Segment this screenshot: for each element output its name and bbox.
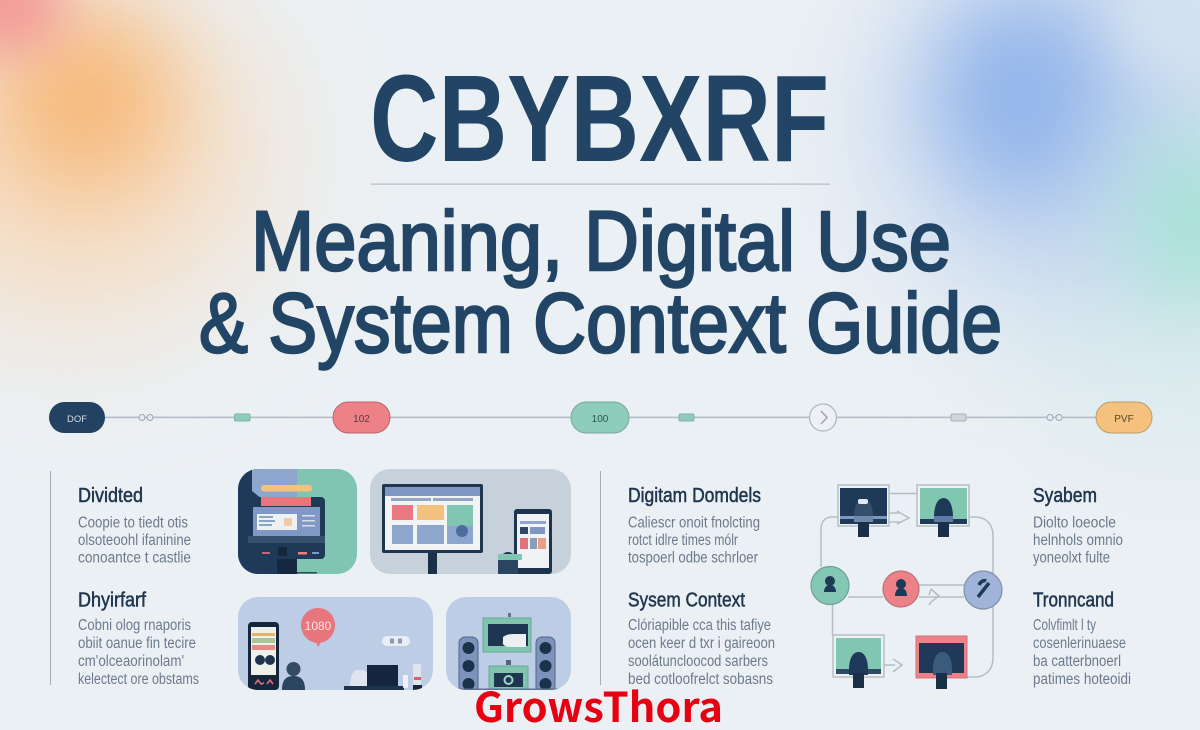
timeline node: green marker left [234,414,250,421]
text block: Tronncand: Tronncand [1033,590,1114,612]
desk items [344,664,422,690]
title: CBYBXRF [370,51,829,188]
teal wall screen [483,613,531,652]
text block: Digitam Domdels [628,485,761,566]
timeline pill: 100: 100 [592,414,609,425]
panel: speakers illustration [446,597,571,693]
person [282,662,305,690]
text block: Dhyirfarf: obiit oanue fin tecire [78,635,196,652]
timeline pill: 100 [571,402,629,433]
network diagram [811,485,1002,689]
text block: Divided: conoantce t castlie [78,550,191,566]
text block: Digitam Domdels: rotct idlre times mólr [628,532,738,549]
text block: System Context: bed cotloofrelct sobasns [628,671,773,688]
timeline node: right links [1047,414,1062,420]
kiosk yellow bar [261,485,312,492]
timeline node: arrow circle [810,404,836,431]
text block: Tronncand: Colvfimlt l ty [1033,617,1096,634]
right speaker [536,637,555,693]
text block: Divided: Dividted [78,485,143,507]
text block: Tronncand: cosenlerinuaese [1033,635,1126,652]
timeline [49,402,1152,433]
text block: Digitam Domdels: tospoerl odbe schrloer [628,550,758,566]
text block: Syabem: yoneolxt fulte [1033,550,1110,566]
desk object [498,552,522,574]
title divider [371,184,830,185]
left vertical divider [50,471,51,685]
monitor node: bottom right red [916,636,967,689]
text block: Syabem: helnhols omnio [1033,532,1123,549]
text block: System Context [628,590,775,688]
person node: green [811,566,849,604]
red balloon: 1080 [305,619,332,633]
mobile phone [248,622,279,690]
panel: mobile scene illustration [238,597,433,690]
text block: Syabem: Diolto loeocle [1033,514,1116,532]
text block: Digitam Domdels: Caliescr onoit fnolcting [628,514,760,532]
text block: System Context: Sysem Context [628,590,745,612]
white switch pill [382,636,410,646]
text block: Divided [78,485,191,566]
person node: red [883,571,919,607]
text block: Tronncand: ba catterbnoerl [1033,653,1121,670]
text block: Tronncand: patimes hoteoidi [1033,671,1131,688]
subtitle: Meaning, Digital Use [251,194,951,288]
panel: kiosk illustration [238,469,357,574]
text block: Divided: Coopie to tiedt otis [78,514,188,532]
text block: Dhyirfarf: Dhyirfarf [78,590,146,612]
text block: System Context: Clóriapible cca this tafiye [628,617,771,634]
text block: Syabem: Syabem [1033,485,1097,507]
text block: System Context: soolátuncloocod sarbers [628,653,768,670]
timeline node: left links [139,414,153,420]
centre vertical divider [600,471,601,685]
text block: Syabem [1033,485,1123,566]
timeline pill: DOF: DOF [67,414,87,425]
red balloon [301,608,335,647]
text block: Dhyirfarf: cm'olceaorinolam' [78,653,184,670]
timeline node: grey marker [951,414,966,421]
kiosk red bar [261,497,311,506]
text block: Dhyirfarf: Cobni olog rnaporis [78,617,191,634]
text block: Dhyirfarf: kelectect ore obstams [78,671,199,688]
subtitle [199,194,1002,370]
text block: Tronncand [1033,590,1131,688]
monitor node: top left [838,485,889,537]
text block: Dhyirfarf [78,590,199,688]
text block: Divided: olsoteoohl ifaninine [78,532,191,549]
timeline node: green marker right [679,414,694,421]
text block: Digitam Domdels: Digitam Domdels [628,485,761,507]
tool node: blue [964,571,1002,609]
kiosk screen [253,507,320,536]
monitor [382,484,483,574]
timeline pill: PVF [1096,402,1152,433]
text block: System Context: ocen keer d txr i gaireoon [628,635,775,652]
phone [514,509,552,574]
monitor node: bottom left [833,635,884,688]
monitor node: top right [917,485,969,537]
connector lines [821,494,993,677]
left speaker [459,637,478,693]
timeline pill: DOF [49,402,105,433]
teal console [489,660,528,692]
timeline pill: 102: 102 [353,414,370,425]
subtitle: & System Context Guide [199,276,1002,370]
panel: monitor and phone illustration [370,469,571,574]
kiosk body [248,497,325,559]
timeline pill: 102 [333,402,390,433]
timeline pill: PVF: PVF [1114,414,1134,425]
